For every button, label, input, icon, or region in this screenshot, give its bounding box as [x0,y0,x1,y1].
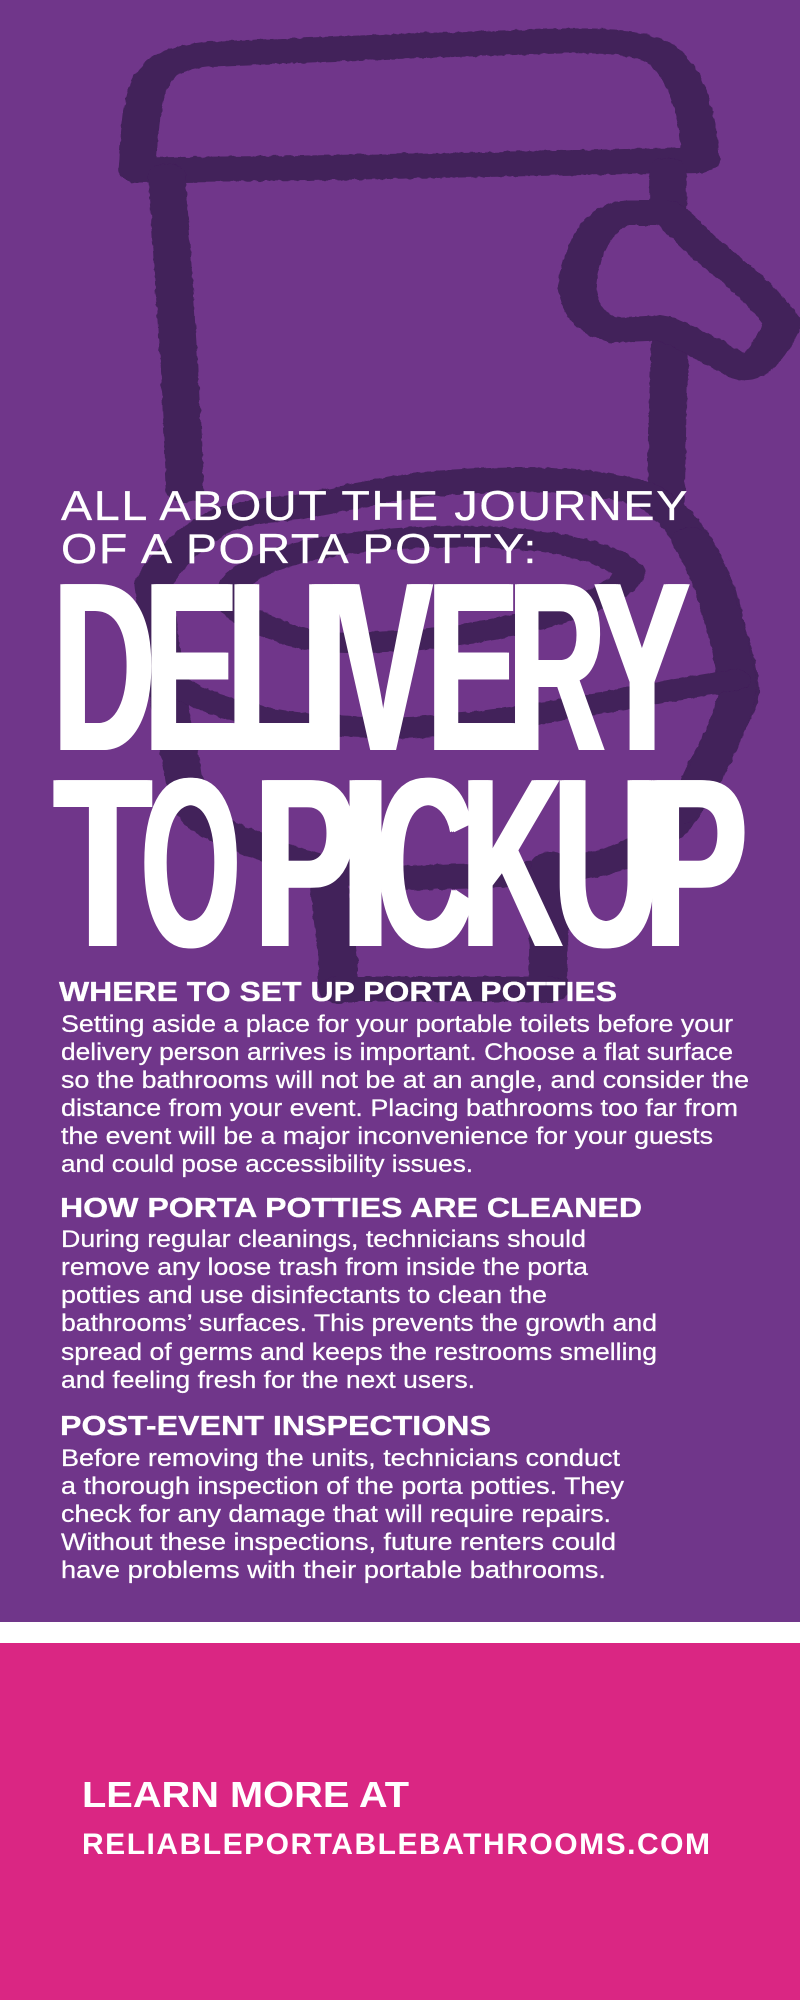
body: where to set up paragraph: and could pose accessibility issues. [61,1151,473,1178]
heading: DELIVERY [53,533,690,802]
body: inspections paragraph [61,1445,624,1584]
body: cleaning paragraph: During regular cleanings, technicians should [61,1226,586,1253]
heading: title intro lines: ALL ABOUT THE JOURNEY [61,482,689,529]
text block: how porta potties are cleaned [60,1192,657,1394]
callout: learn more and website: RELIABLEPORTABLEBATHROOMS.COM [82,1828,710,1861]
body: inspections paragraph: Before removing the units, technicians conduct [61,1445,620,1472]
heading: DELIVERY: Y [594,533,690,802]
heading: title intro lines [60,482,689,572]
heading: DELIVERY: L [227,533,314,802]
callout: learn more and website: LEARN MORE AT [82,1774,409,1815]
body: where to set up paragraph: distance from your event. Placing bathrooms too far from [61,1095,738,1122]
heading: DELIVERY: I [300,533,349,802]
heading: where to set up porta potties: WHERE TO SET UP PORTA POTTIES [59,976,617,1007]
heading: TO PICKUP: O [140,729,240,998]
callout: learn more and website [82,1774,710,1861]
body: cleaning paragraph: bathrooms’ surfaces. This prevents the growth and [61,1310,657,1337]
body: inspections paragraph: a thorough inspection of the porta potties. They [61,1473,624,1500]
body: where to set up paragraph: Setting aside a place for your portable toilets before your [61,1011,733,1038]
body: inspections paragraph: check for any damage that will require repairs. [61,1501,611,1528]
body: cleaning paragraph: potties and use disinfectants to clean the [61,1282,547,1309]
heading: post-event inspections: POST-EVENT INSPECTIONS [60,1410,491,1441]
body: cleaning paragraph: and feeling fresh for the next users. [61,1367,475,1394]
heading: how porta potties are cleaned: HOW PORTA POTTIES ARE CLEANED [60,1192,642,1223]
heading: TO PICKUP: I [340,729,391,998]
heading: DELIVERY: E [144,533,239,802]
heading: TO PICKUP: T [54,729,151,998]
heading: TO PICKUP: P [254,729,356,998]
text block: post-event inspections [60,1410,624,1584]
body: cleaning paragraph: spread of germs and keeps the restrooms smelling [61,1339,657,1366]
body: cleaning paragraph [61,1226,657,1394]
heading: TO PICKUP [53,729,747,998]
body: cleaning paragraph: remove any loose trash from inside the porta [61,1254,589,1281]
body: where to set up paragraph [61,1011,749,1178]
heading: DELIVERY: R [508,533,606,802]
heading: DELIVERY: E [427,533,519,802]
icon: hand-drawn toilet outline [118,28,800,1004]
body: where to set up paragraph: so the bathrooms will not be at an angle, and consider the [61,1067,749,1094]
heading: title intro lines: OF A PORTA POTTY: [61,525,538,572]
body: where to set up paragraph: the event will be a major inconvenience for your guests [61,1123,713,1150]
heading: DELIVERY: V [334,533,432,802]
heading: DELIVERY: D [53,533,155,802]
panel: pink footer [0,1643,800,2000]
heading: TO PICKUP: P [644,729,747,998]
panel: white divider band [0,1622,800,1643]
heading: TO PICKUP: C [376,729,474,998]
body: inspections paragraph: Without these inspections, future renters could [61,1529,616,1556]
body: inspections paragraph: have problems with their portable bathrooms. [61,1557,606,1584]
heading: TO PICKUP: U [553,729,660,998]
heading: TO PICKUP: K [461,729,562,998]
text block: where to set up [58,976,749,1178]
body: where to set up paragraph: delivery person arrives is important. Choose a flat surface [61,1039,733,1066]
